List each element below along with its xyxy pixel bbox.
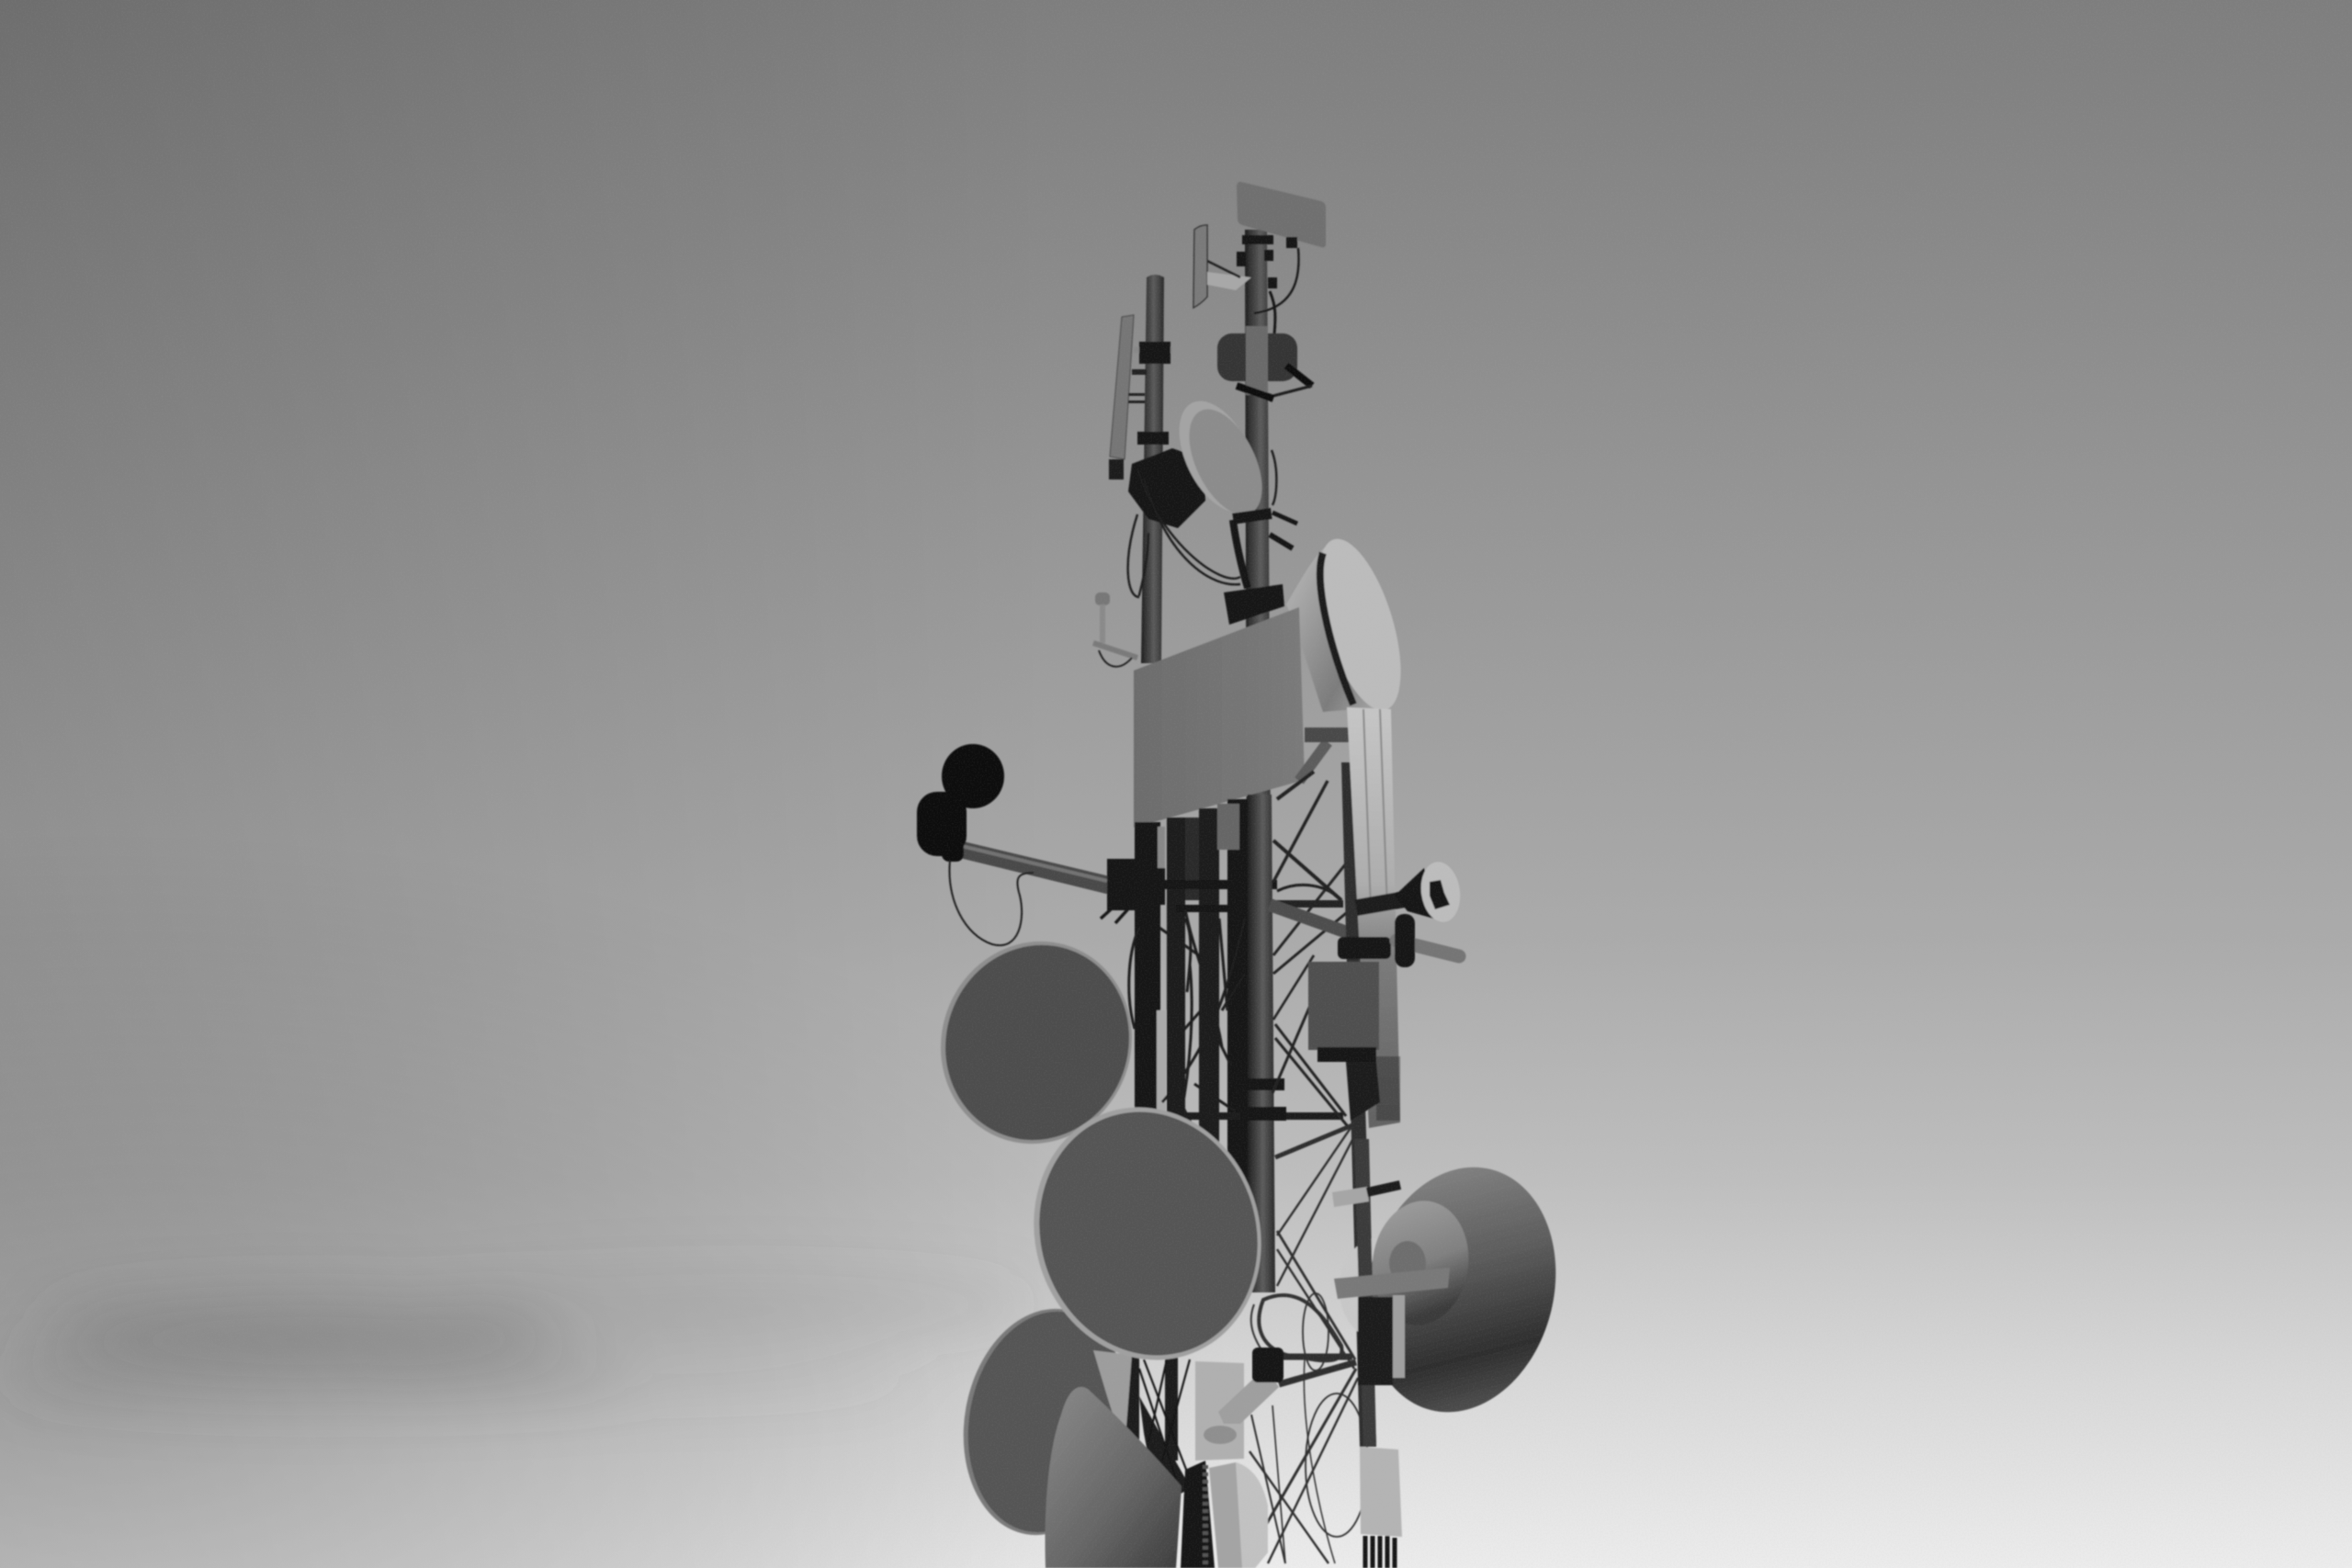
main lower mast	[1240, 795, 1286, 1292]
large front dish two	[1001, 1077, 1294, 1390]
lower radio unit	[1181, 1461, 1268, 1568]
black radio behind small dish	[1128, 448, 1205, 528]
large rectangular panel antenna	[1134, 607, 1305, 828]
dark clouds low on the left	[0, 1273, 1038, 1404]
dish clamps and mount	[1332, 1185, 1450, 1385]
security camera	[1204, 1348, 1283, 1444]
grey dish one	[912, 914, 1160, 1171]
small side sector antenna	[1193, 225, 1251, 308]
lattice cables	[1129, 885, 1341, 1130]
long panel antenna on left mast	[1109, 315, 1172, 479]
cable coil	[1251, 1293, 1341, 1371]
mount under small dish	[1224, 508, 1297, 625]
camera mounting plate	[1195, 1361, 1244, 1461]
diagonal braces upper	[1270, 735, 1360, 1130]
small enclosure on right mast	[1360, 1447, 1402, 1568]
dangling cable from arm	[949, 860, 1034, 945]
cross braces lower	[1250, 1125, 1368, 1563]
lower cables and legs	[1093, 1350, 1191, 1506]
right upper mast	[1245, 230, 1273, 1292]
weather sensor on bracket	[1093, 592, 1137, 667]
top mast clamp and cable	[1237, 235, 1299, 334]
small radome dish	[1163, 389, 1277, 526]
front side-on dish, bottom	[1046, 1387, 1182, 1568]
white parabolic dish, top	[1286, 530, 1418, 719]
tower and antennas	[912, 182, 1581, 1568]
left upper mast	[1141, 275, 1164, 663]
tall sector antenna	[1338, 707, 1408, 1128]
equipment box on sector antenna	[1308, 962, 1380, 1121]
right large dish	[1340, 1147, 1581, 1432]
cables between masts	[1128, 450, 1276, 597]
grey dish three, lower left	[946, 1296, 1145, 1548]
left side arm	[930, 834, 1140, 923]
lattice behind panel	[1130, 799, 1343, 1258]
right mast passing in front of dish	[1354, 1139, 1376, 1447]
black round sensor heads on arm	[917, 744, 1004, 862]
small black dish with worn face	[1395, 859, 1464, 967]
right thin mast	[1341, 762, 1376, 1447]
dome radio on right mast	[1217, 326, 1312, 399]
top flat panel antenna	[1237, 182, 1326, 247]
horizontal pipe stub on right	[1396, 941, 1459, 956]
